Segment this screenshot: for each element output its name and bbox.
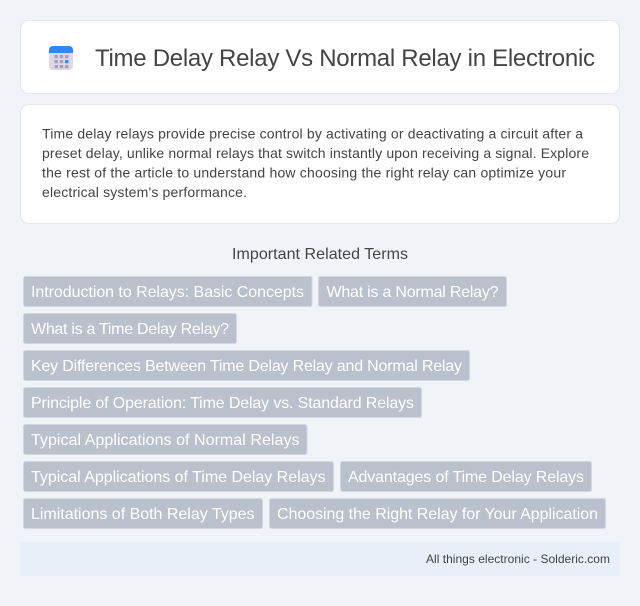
tag: introduction — [24, 276, 312, 306]
tag: advantages: Advantages of Time Delay Relays — [348, 469, 584, 486]
tag list — [24, 276, 606, 528]
tag: time delay relay: What is a Time Delay Relay? — [31, 321, 229, 338]
tag: principle of operation — [24, 388, 422, 418]
title: Time Delay Relay Vs Normal Relay in Electronic — [95, 45, 595, 72]
tag: time delay relay — [24, 314, 236, 344]
tag: principle of operation: Principle of Operation: Time Delay vs. Standard Relays — [31, 395, 414, 412]
panel: description: Time delay relays provide precise control by activating or deactivating a circuit after a — [42, 126, 583, 142]
tag: key differences — [24, 350, 470, 380]
panel: description: electrical system's performance. — [42, 184, 247, 200]
footer: All things electronic - Solderic.com — [426, 552, 610, 566]
footer — [20, 542, 620, 576]
tag: limitations — [24, 498, 262, 528]
tag: normal relay — [318, 276, 506, 306]
tag: time delay applications: Typical Applications of Time Delay Relays — [31, 469, 326, 486]
tag: choosing — [270, 498, 606, 528]
heading: related terms: Important Related Terms — [232, 246, 408, 263]
tag: normal applications: Typical Applications of Normal Relays — [31, 432, 300, 449]
header card — [20, 20, 620, 94]
tag: time delay applications — [24, 462, 334, 492]
tag: choosing: Choosing the Right Relay for Your Application — [277, 506, 598, 523]
tag: introduction: Introduction to Relays: Basic Concepts — [31, 284, 304, 301]
panel: description — [20, 104, 620, 224]
panel: description: the rest of the article to understand how choosing the right relay can optimize your — [42, 164, 566, 180]
tag: key differences: Key Differences Between Time Delay Relay and Normal Relay — [31, 358, 462, 375]
tag: limitations: Limitations of Both Relay Types — [31, 506, 254, 523]
tag: normal relay: What is a Normal Relay? — [326, 284, 499, 301]
panel: description: preset delay, unlike normal relays that switch instantly upon receiving a signal. Explore — [42, 145, 589, 161]
tag: normal applications — [24, 424, 307, 454]
icon: calendar — [49, 46, 73, 70]
tag: advantages — [340, 462, 592, 492]
